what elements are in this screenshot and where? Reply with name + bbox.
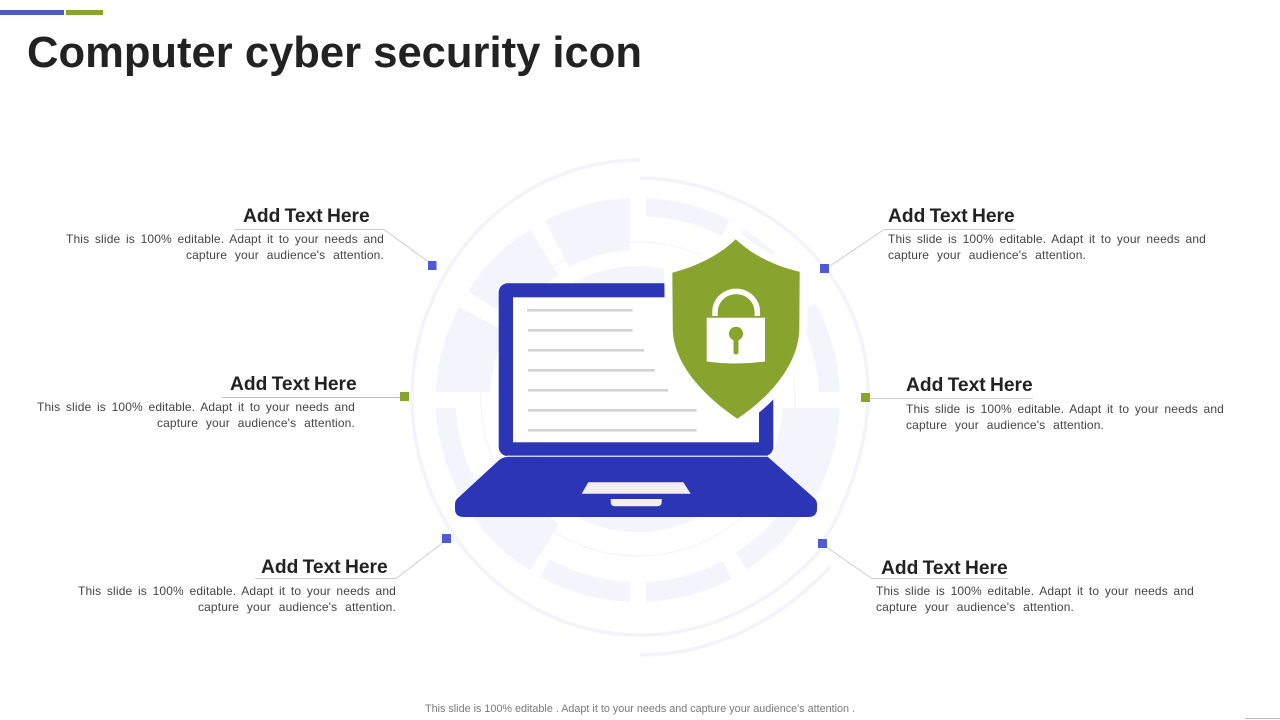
callout: bottom left [78,557,396,614]
callout: middle right: This slide is 100% editable. Adapt it to your needs and [906,402,1224,416]
callout: middle left: This slide is 100% editable. Adapt it to your needs and [37,400,355,414]
callout: bottom right [876,558,1194,614]
connector: middle right [870,398,1033,400]
callout: top right [888,206,1206,262]
node: bottom left [442,534,451,543]
node: middle left [400,392,409,401]
callout: top left: Add Text Here [243,206,370,227]
callout: bottom left: This slide is 100% editable. Adapt it to your needs and [78,584,396,598]
callout: bottom left: capture your audience's attention. [198,600,396,614]
callout: middle right [906,375,1224,432]
trackpad [582,482,691,494]
callout: bottom right: Add Text Here [881,558,1008,579]
keyhole [729,327,743,341]
connector: middle left [222,396,400,398]
node: top left [428,261,436,270]
laptop lid [499,283,773,456]
background thin rings [412,160,868,655]
node: middle right [861,393,870,402]
callout: top right: Add Text Here [888,206,1015,227]
accent bars [0,10,103,15]
callout: top left: This slide is 100% editable. Adapt it to your needs and [66,232,384,246]
laptop base [455,457,817,517]
footer note: This slide is 100% editable . Adapt it to your needs and capture your audience's attention . [425,703,855,715]
callout: middle left: Add Text Here [230,374,357,395]
hinge line [507,456,768,457]
background radial segments [446,207,830,592]
callout: bottom right: This slide is 100% editable. Adapt it to your needs and [876,584,1194,598]
screen text lines [527,310,697,430]
connector: top left [234,230,430,263]
trackpad button [611,499,662,506]
callout: middle left [37,374,357,430]
callout: top right: capture your audience's attention. [888,248,1086,262]
laptop screen [513,297,759,442]
callout: bottom right: capture your audience's attention. [876,600,1074,614]
callout: middle right: capture your audience's attention. [906,418,1104,432]
callout: top left [66,206,384,262]
node: bottom right [818,539,827,548]
padlock body [707,318,765,364]
padlock shackle [715,291,757,316]
callout: top left: capture your audience's attention. [186,248,384,262]
callout: middle right: Add Text Here [906,375,1033,396]
connector: bottom right [826,547,1008,578]
title: Computer cyber security icon [27,28,642,77]
shield with padlock [672,239,800,419]
callout: middle left: capture your audience's attention. [157,416,355,430]
connector: top right [830,230,1015,266]
laptop [455,283,817,517]
shield [672,239,800,419]
callout: bottom left: Add Text Here [261,557,388,578]
node: top right [820,264,829,273]
connector: bottom left [255,541,445,578]
callout: top right: This slide is 100% editable. Adapt it to your needs and [888,232,1206,246]
